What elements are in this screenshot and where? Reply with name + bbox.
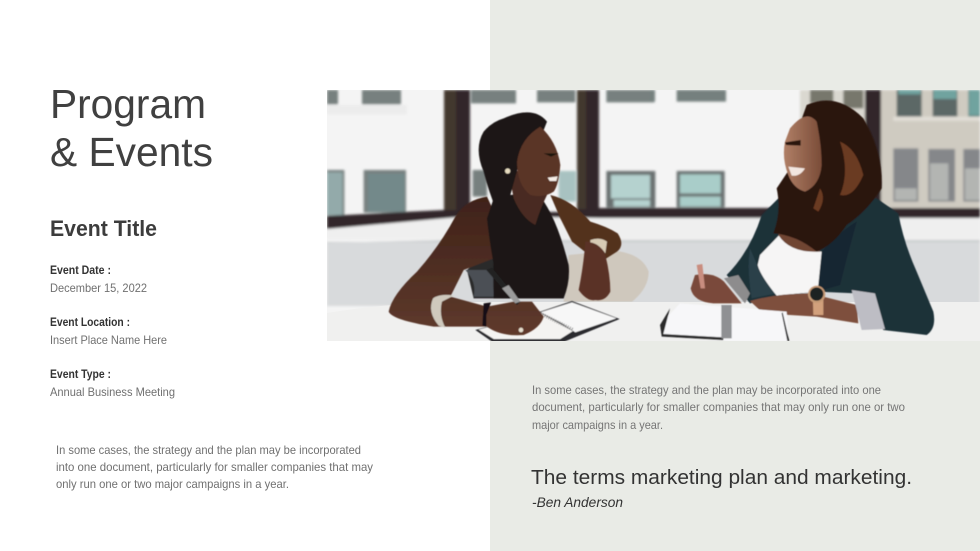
window frames	[327, 90, 980, 229]
text block: right description: document, particularly for smaller companies that may only run one or two	[532, 400, 905, 414]
title: & Events	[50, 129, 213, 175]
quote: The terms marketing plan and marketing.	[531, 467, 912, 489]
text block: right description	[532, 383, 905, 432]
text block: event date	[50, 263, 147, 295]
table	[385, 302, 980, 306]
woman right	[660, 101, 934, 341]
text block: event date: December 15, 2022	[50, 281, 147, 295]
text block: right description: In some cases, the strategy and the plan may be incorporated into one	[532, 383, 881, 397]
photo background: building, windows and wall	[327, 90, 980, 306]
panel: right background	[490, 0, 980, 551]
text block: event location	[50, 315, 167, 347]
text block: left description: only run one or two major campaigns in a year.	[56, 477, 289, 491]
heading: event title: Event Title	[50, 216, 157, 241]
left notebook	[475, 301, 620, 342]
text block: event type	[50, 367, 175, 399]
chair	[564, 251, 649, 302]
text block: left description	[56, 443, 373, 491]
title	[50, 81, 213, 175]
woman left	[389, 112, 621, 335]
text block: left description: into one document, particularly for smaller companies that may	[56, 460, 373, 474]
text block: right description: major campaigns in a year.	[532, 418, 663, 432]
text block: event date: Event Date :	[50, 263, 111, 277]
title: Program	[50, 81, 206, 127]
quote attribution: -Ben Anderson	[532, 494, 623, 510]
text block: event type: Annual Business Meeting	[50, 385, 175, 399]
text block: event type: Event Type :	[50, 367, 111, 381]
wall ledge	[327, 214, 980, 230]
text block: left description: In some cases, the strategy and the plan may be incorporated	[56, 443, 361, 457]
text block: event location: Insert Place Name Here	[50, 333, 167, 347]
text block: event location: Event Location :	[50, 315, 130, 329]
photo: two women at a meeting table	[327, 90, 980, 342]
